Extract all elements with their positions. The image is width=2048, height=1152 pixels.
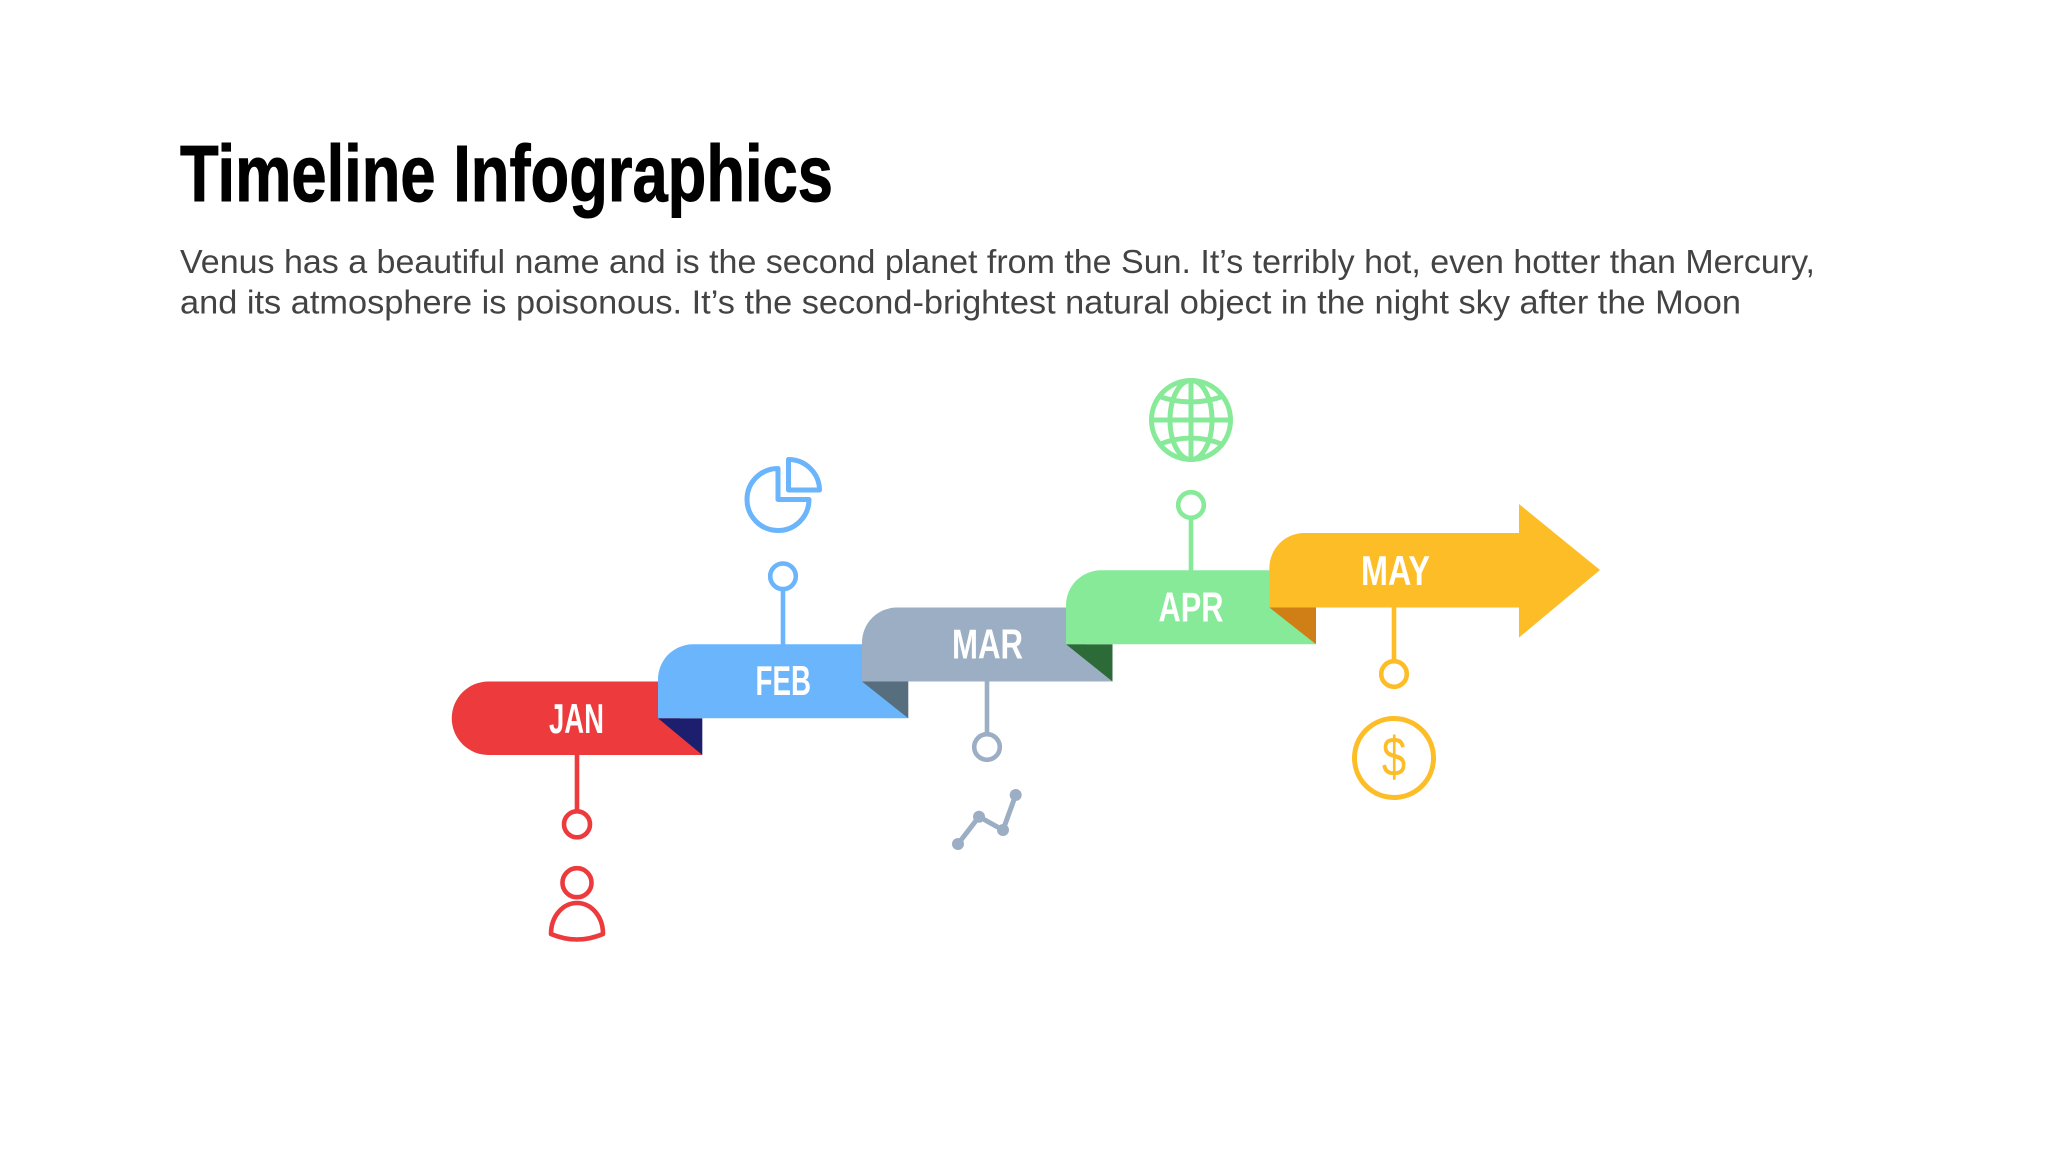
APR fold bbox=[1269, 608, 1316, 644]
MAY stem and node bbox=[1381, 600, 1407, 687]
JAN stem and node bbox=[564, 750, 590, 837]
JAN fold bbox=[658, 718, 702, 755]
step: FEB bbox=[658, 459, 908, 718]
step: JAN bbox=[452, 682, 702, 940]
FEB fold bbox=[862, 682, 908, 718]
MAY label: MAY bbox=[1361, 547, 1430, 594]
description text: Venus has a beautiful name and is the second planet from the Sun. It’s terribly hot, even hotter than Mercury, bbox=[180, 243, 1815, 280]
description text: and its atmosphere is poisonous. It’s the second-brightest natural object in the night sky after the Moon bbox=[180, 284, 1741, 320]
icon: globe bbox=[1152, 380, 1230, 460]
FEB ribbon bbox=[658, 644, 908, 718]
FEB label: FEB bbox=[756, 657, 811, 704]
icon: person bbox=[551, 868, 603, 940]
title: Timeline Infographics bbox=[180, 129, 833, 218]
APR label: APR bbox=[1158, 584, 1224, 631]
icon: dollar coin: $ bbox=[1382, 726, 1406, 788]
MAR fold bbox=[1066, 644, 1112, 682]
step: MAR bbox=[862, 608, 1112, 850]
APR stem and node bbox=[1178, 492, 1204, 576]
FEB stem and node bbox=[770, 564, 796, 650]
icon: line chart bbox=[952, 789, 1022, 850]
step: APR bbox=[1066, 380, 1316, 644]
description text bbox=[180, 243, 1815, 320]
icon: dollar coin bbox=[1354, 718, 1434, 798]
JAN label: JAN bbox=[549, 695, 604, 742]
MAR ribbon bbox=[862, 608, 1112, 682]
JAN ribbon bbox=[452, 682, 702, 755]
MAR label: MAR bbox=[952, 621, 1023, 668]
icon: pie chart bbox=[747, 459, 820, 530]
MAY arrow ribbon bbox=[1269, 504, 1600, 638]
APR ribbon bbox=[1066, 570, 1316, 644]
step: MAY bbox=[1269, 504, 1600, 798]
MAR stem and node bbox=[974, 675, 1000, 760]
